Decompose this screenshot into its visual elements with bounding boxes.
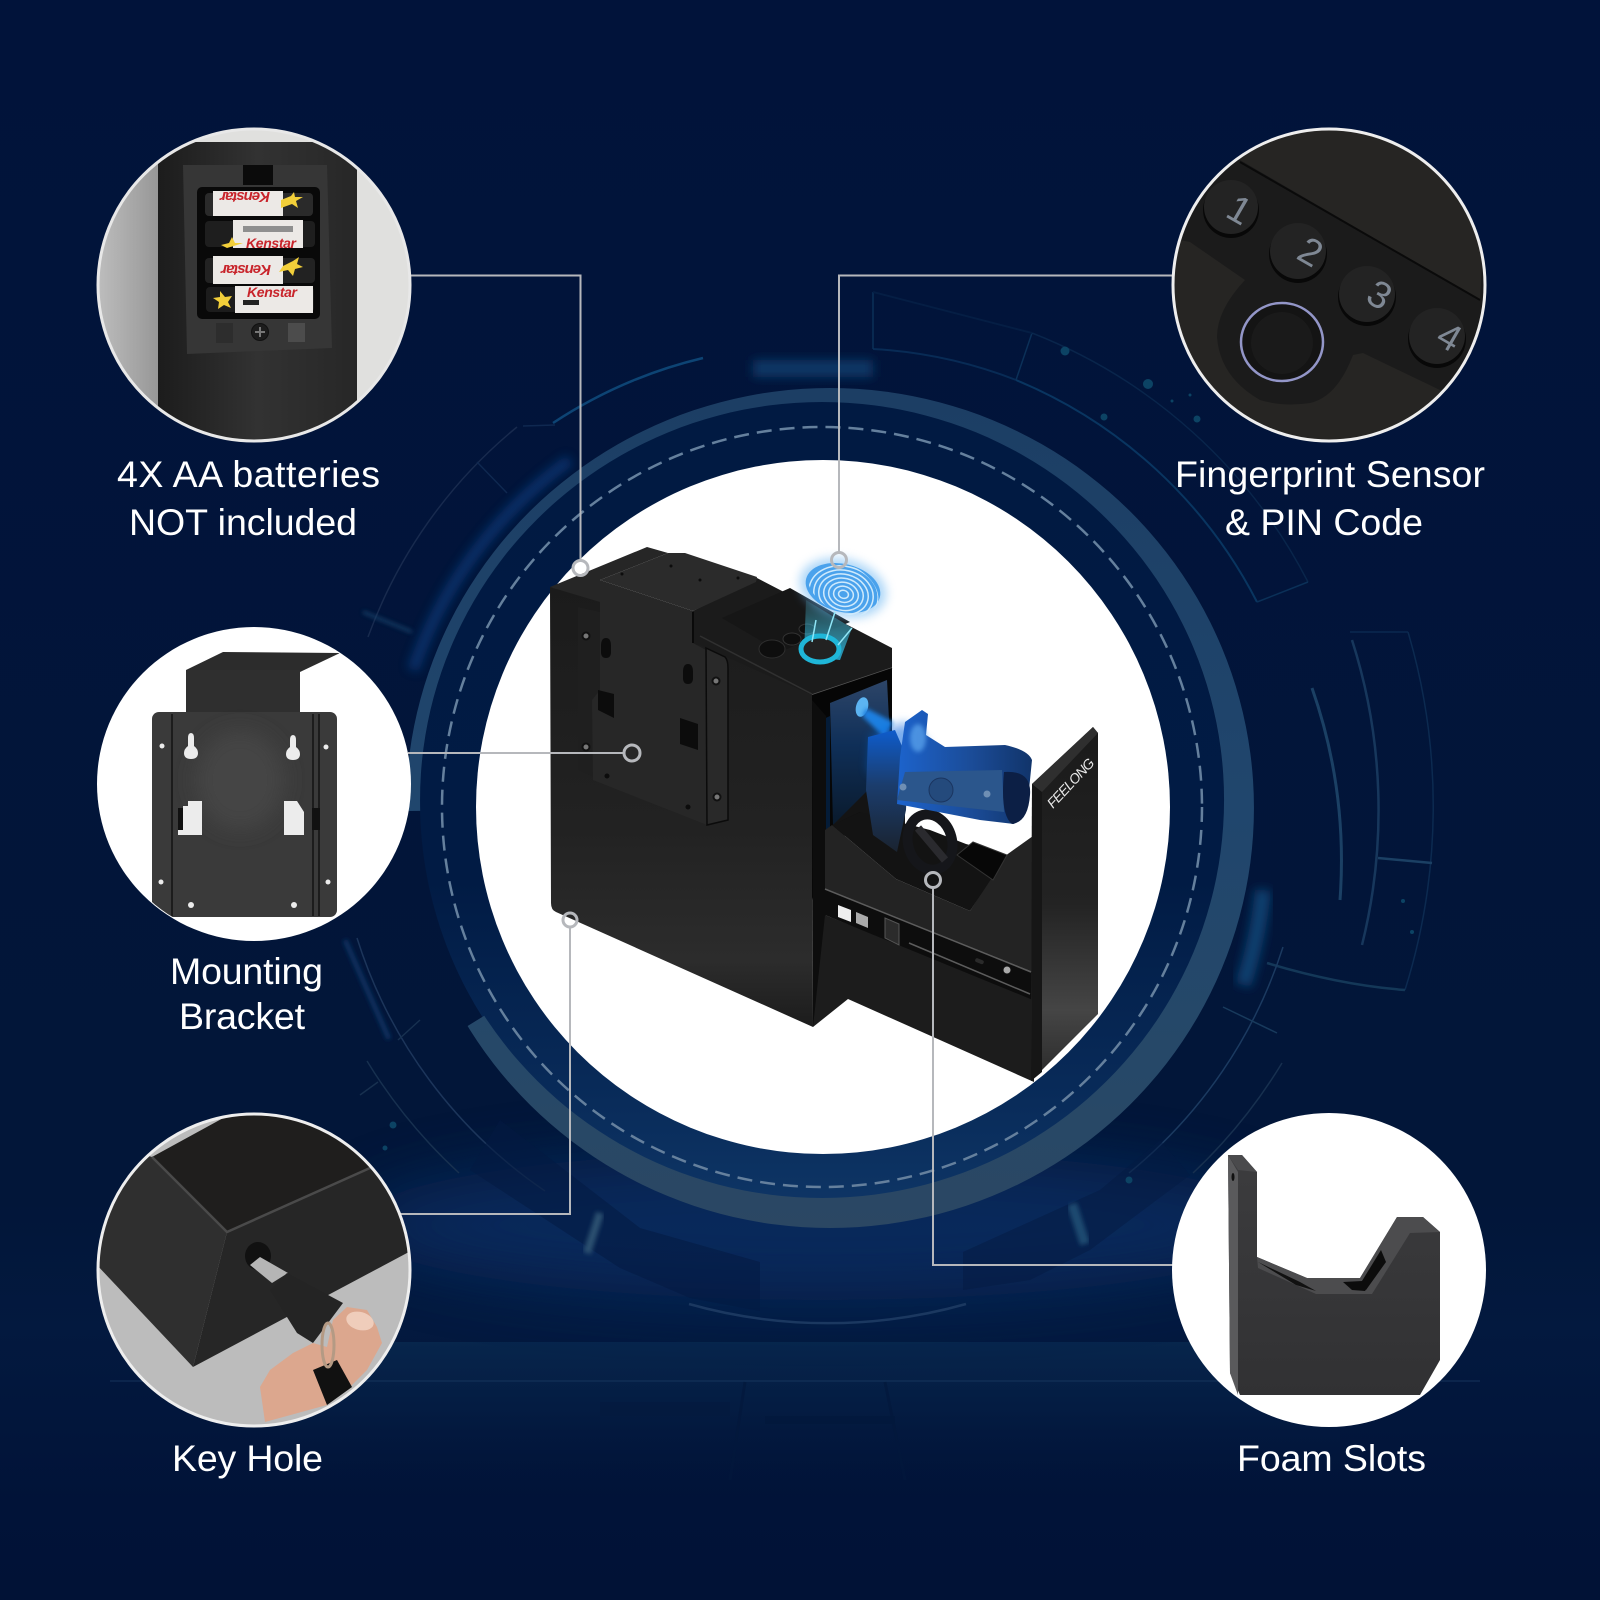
panel: key hole — [90, 1105, 420, 1435]
keypad buttons: 3 — [1359, 272, 1399, 319]
textured surfaces — [1170, 120, 1490, 443]
product: safe with open drawer — [550, 547, 1098, 1082]
opening interior — [812, 668, 905, 900]
infographic canvas — [96, 128, 1486, 1478]
top glow bar — [753, 360, 873, 377]
central white circle — [476, 460, 1170, 1154]
panel: foam slots — [1172, 1113, 1486, 1427]
battery row 3: Kenstar — [220, 261, 271, 278]
leader: fingerprint sensor — [832, 276, 1176, 568]
icon: fingerprint hologram — [793, 549, 893, 662]
label: fingerprint sensor — [1175, 453, 1485, 543]
battery row 4 — [206, 284, 314, 313]
brand text: FEELONG — [1043, 755, 1098, 811]
background tech rings — [345, 292, 1433, 1323]
label: mounting bracket — [170, 950, 323, 1037]
battery compartment — [183, 165, 332, 354]
safe corner — [95, 1105, 420, 1367]
safe top face — [693, 578, 892, 695]
battery row 2: Kenstar — [246, 235, 298, 251]
label: key hole: Key Hole — [172, 1437, 323, 1479]
left outer glow — [413, 460, 570, 670]
leader: foam slots — [926, 872, 1176, 1265]
drawer front panel with FEELONG — [1031, 727, 1098, 1081]
foam cradle — [832, 812, 1007, 911]
mounting bracket on safe — [578, 553, 757, 825]
panel: mounting bracket — [97, 627, 411, 941]
battery row 1: Kenstar — [219, 188, 270, 205]
lower arcs — [345, 938, 1283, 1323]
lower dark sector blocks — [470, 1120, 1190, 1311]
dashed ring — [442, 427, 1202, 1187]
keypad buttons: 1 — [1219, 187, 1259, 234]
front edge — [812, 700, 826, 1027]
battery row 3 — [205, 256, 315, 284]
key — [245, 1242, 343, 1343]
keypad buttons: 2 — [1290, 229, 1330, 276]
drawer side lower — [813, 915, 1034, 1082]
battery row 4: Kenstar — [247, 284, 299, 300]
upper arcs — [363, 292, 1308, 637]
battery row 1 — [205, 191, 313, 216]
steel blue ring band — [406, 388, 1254, 1228]
pistol with blue light — [854, 696, 1032, 875]
label: fingerprint sensor: Fingerprint Sensor — [1175, 453, 1485, 495]
labels — [117, 453, 1485, 1479]
ball bearing slide rail — [825, 889, 1033, 1000]
leader lines and anchor rings — [398, 276, 1176, 1265]
hand holding key — [260, 1307, 382, 1422]
label: mounting bracket: Bracket — [179, 995, 306, 1037]
leader: mounting bracket — [408, 745, 640, 761]
leader: key hole — [398, 913, 577, 1214]
fingerprint sensor — [1241, 303, 1323, 381]
label: batteries: 4X AA batteries — [117, 453, 380, 495]
label: batteries — [117, 453, 380, 543]
inner annulus — [420, 400, 1224, 1204]
safe side face — [550, 587, 813, 1027]
leader: batteries — [408, 276, 588, 576]
panel: fingerprint keypad — [1170, 120, 1490, 445]
safe back top — [550, 547, 668, 605]
battery row 2 — [205, 220, 315, 251]
label: foam slots: Foam Slots — [1237, 1437, 1426, 1479]
panel: batteries — [96, 128, 412, 442]
particles — [382, 346, 1414, 1184]
label: batteries: NOT included — [129, 501, 357, 543]
label: mounting bracket: Mounting — [170, 950, 323, 992]
label: fingerprint sensor: & PIN Code — [1225, 501, 1423, 543]
keypad buttons — [1203, 198, 1466, 368]
drawer side upper — [825, 825, 1033, 972]
keypad buttons: 4 — [1429, 314, 1469, 361]
right arcs — [1243, 632, 1433, 990]
